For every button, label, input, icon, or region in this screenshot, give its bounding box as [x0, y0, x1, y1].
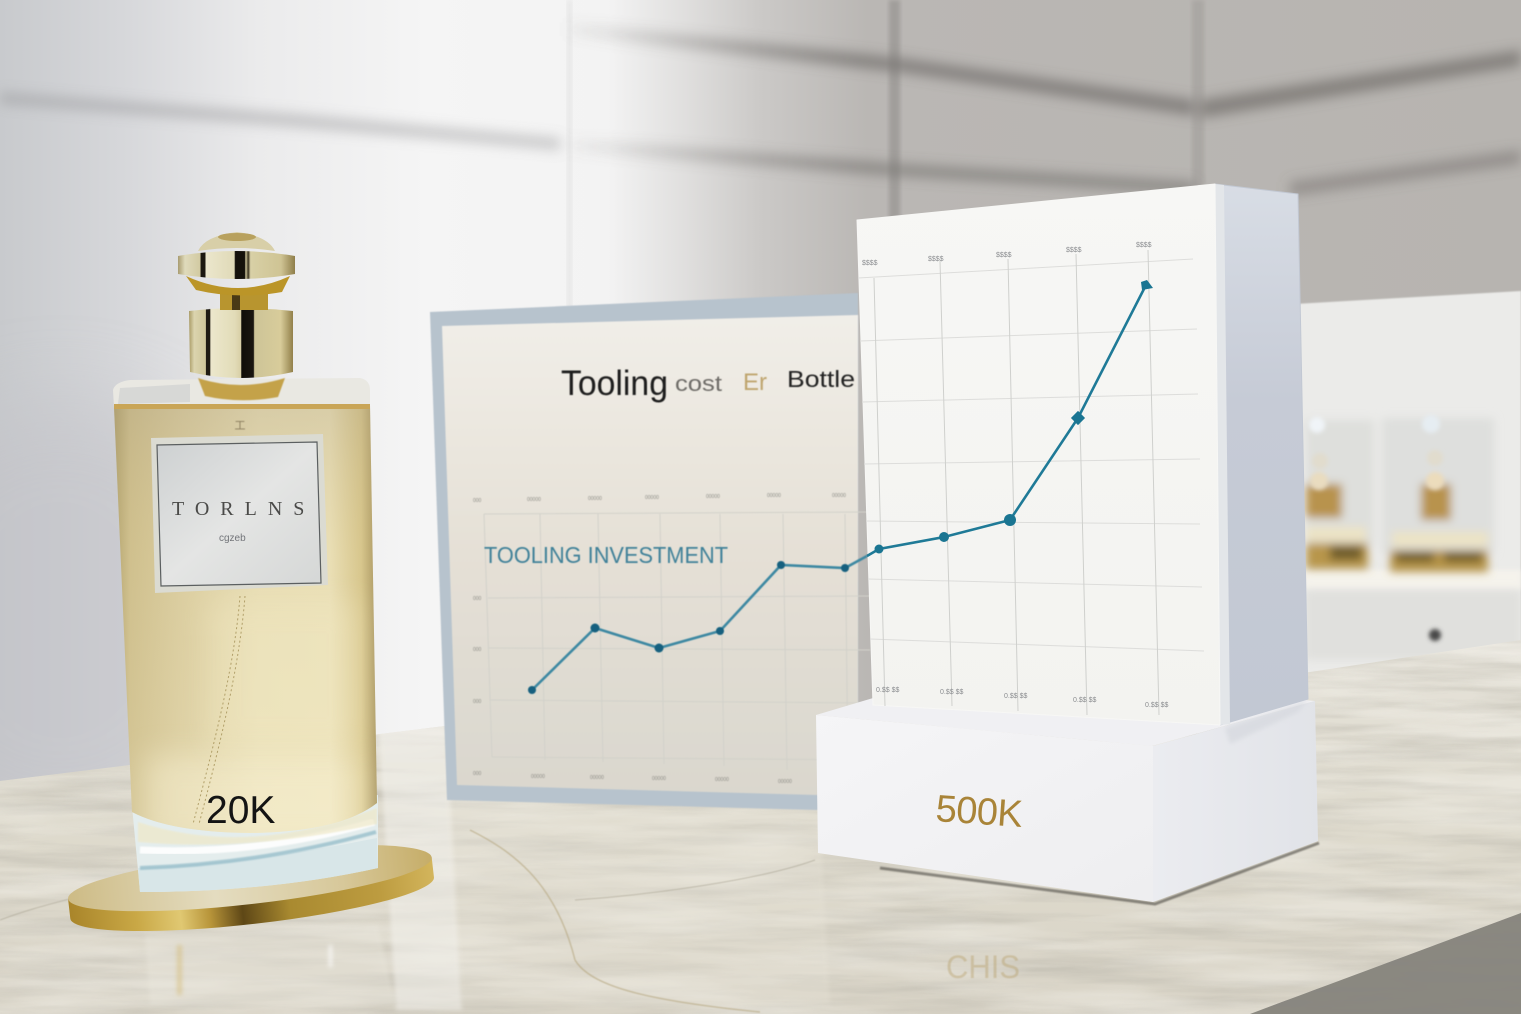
- box chart axis labels: 0.$$ $$: [940, 689, 963, 696]
- bottle label: [151, 434, 328, 593]
- brand sub text: cgzeb: [219, 533, 246, 544]
- poster axis labels: 00000: [590, 775, 604, 781]
- poster axis labels: 000: [473, 699, 482, 705]
- poster axis labels: 000: [473, 596, 482, 602]
- box chart axis labels: [862, 242, 1168, 709]
- poster line series: [528, 556, 867, 694]
- brand name: TORLNS: [172, 498, 315, 520]
- poster axis labels: 00000: [778, 779, 792, 785]
- poster title: cost: [675, 371, 722, 396]
- poster axis labels: 00000: [652, 776, 666, 782]
- volume 20K: 20K: [206, 789, 275, 832]
- marble veins: [0, 830, 815, 1012]
- box chart axis labels: $$$$: [1066, 247, 1082, 254]
- box chart axis labels: $$$$: [996, 252, 1012, 259]
- poster axis labels: 000: [473, 771, 482, 777]
- poster axis labels: 00000: [588, 496, 602, 502]
- gold plate: [65, 832, 437, 944]
- neck collar: [189, 308, 293, 378]
- box chart axis labels: $$$$: [1136, 242, 1152, 249]
- marble table top: [0, 640, 1521, 1014]
- base block: [816, 690, 1319, 904]
- background shelf with blurred bottles: [1295, 291, 1521, 690]
- liquid body: [114, 405, 377, 833]
- box chart axis labels: 0.$$ $$: [1073, 697, 1096, 704]
- box chart axis labels: $$$$: [862, 260, 878, 267]
- box chart axis labels: $$$$: [928, 256, 944, 263]
- poster axis labels: 00000: [715, 777, 729, 783]
- box chart axis labels: 0.$$ $$: [1004, 693, 1027, 700]
- poster axis labels: 00000: [527, 497, 541, 503]
- bottle small mark: 工: [234, 420, 246, 432]
- poster title: Tooling: [561, 364, 668, 403]
- table reflection streaks: [177, 945, 332, 995]
- poster axis labels: 00000: [832, 493, 846, 499]
- table front edge: [1250, 913, 1521, 1014]
- poster axis labels: 000: [473, 498, 482, 504]
- value 500K: 500K: [934, 788, 1024, 836]
- box chart axis labels: 0.$$ $$: [876, 687, 899, 694]
- tall white box: [857, 184, 1308, 725]
- cap: [186, 276, 290, 296]
- box line series: [867, 280, 1153, 556]
- box chart axis labels: 0.$$ $$: [1145, 702, 1168, 709]
- poster: tooling investment chart: [430, 293, 870, 810]
- stitched line: [193, 596, 245, 824]
- glass shoulder: [113, 378, 370, 408]
- poster axis labels: 00000: [706, 494, 720, 500]
- perfume bottle: [113, 232, 378, 892]
- poster axis labels: 00000: [531, 774, 545, 780]
- glass base: [132, 795, 378, 892]
- poster axis labels: 00000: [645, 495, 659, 501]
- poster axis labels: [473, 493, 846, 785]
- poster subtitle: TOOLING INVESTMENT: [484, 542, 728, 568]
- poster title: [561, 364, 855, 403]
- poster axis labels: 000: [473, 647, 482, 653]
- poster title: Bottle: [787, 366, 855, 392]
- box chart grid: [858, 250, 1204, 715]
- poster title: Er: [743, 369, 767, 396]
- poster axis labels: 00000: [767, 493, 781, 499]
- table reflection text: CHIS: [946, 949, 1020, 985]
